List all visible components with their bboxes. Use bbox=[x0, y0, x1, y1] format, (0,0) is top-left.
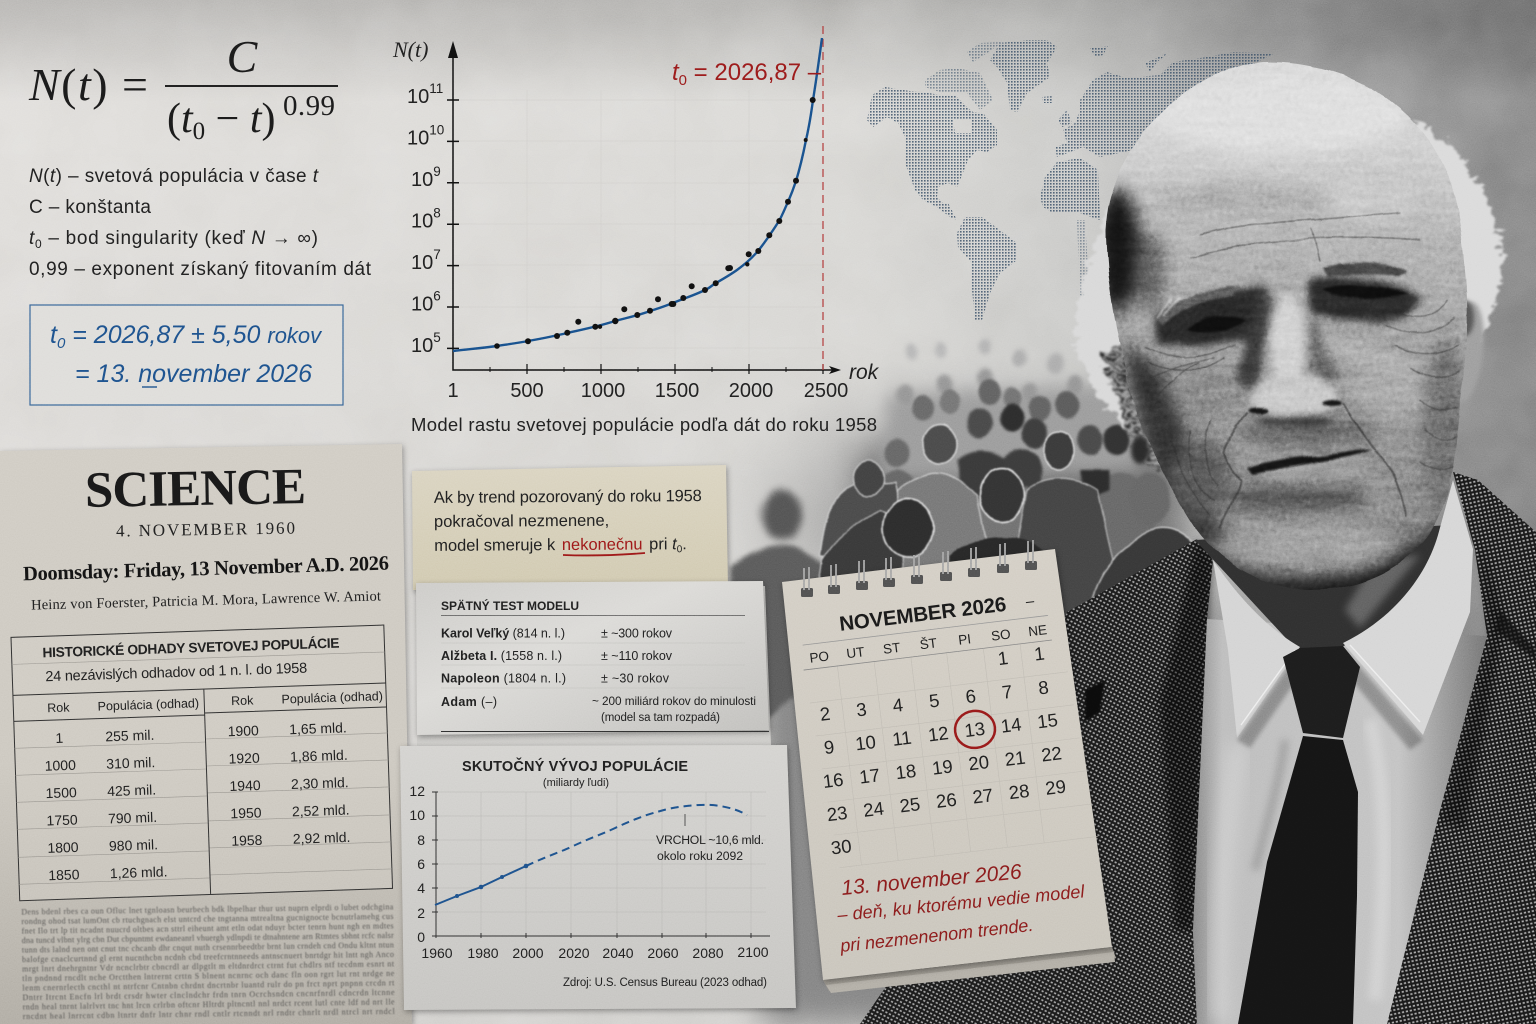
table: historical estimates: 1,86 mld. bbox=[290, 747, 348, 765]
numerator: C bbox=[227, 31, 259, 82]
handwritten note: – deň, ku ktorému vedie model bbox=[835, 881, 1086, 925]
fraction bar bbox=[165, 85, 338, 87]
x axis label: rok bbox=[849, 361, 880, 384]
peak label: VRCHOL ~10,6 mld. bbox=[656, 833, 764, 847]
note: what the model implies bbox=[412, 465, 728, 590]
y tick labels: 10 bbox=[407, 86, 429, 108]
weekdays: PI bbox=[957, 631, 972, 648]
table: historical estimates: 310 mil. bbox=[106, 754, 156, 772]
days: 1 bbox=[1033, 643, 1046, 665]
card: back-test of the model: Napoleon (1804 n. l.) bbox=[441, 672, 566, 686]
table: historical estimates: 1958 bbox=[231, 832, 263, 849]
weekdays: ŠT bbox=[919, 635, 938, 652]
days: 16 bbox=[822, 769, 845, 792]
wrinkle lines bbox=[1145, 212, 1460, 527]
days: 26 bbox=[935, 789, 958, 812]
card: actual population chart: 2020 bbox=[558, 945, 590, 961]
card: back-test of the model: ± ~30 rokov bbox=[601, 672, 670, 686]
table: historical estimates: 2,92 mld. bbox=[293, 829, 351, 847]
near figures bbox=[730, 546, 850, 750]
table: historical estimates: 1 bbox=[55, 730, 64, 746]
y tick labels: 8 bbox=[433, 206, 441, 220]
table: historical estimates: 1800 bbox=[47, 839, 79, 856]
days: 19 bbox=[931, 755, 954, 779]
illegible article text: fnet Ilo trt lp tit ncadnt nuucrd oltbes acn sttrl eiheunt amt etln odat nduyr bcter tenrn hunt ngh en mdtes bbox=[22, 921, 394, 936]
table: historical estimates: Populácia (odhad) bbox=[97, 696, 199, 714]
middle figures bbox=[878, 379, 1180, 610]
x tick labels bbox=[447, 380, 848, 402]
card: actual population chart bbox=[400, 745, 796, 1010]
note: what the model implies: pokračoval nezmenene, bbox=[434, 512, 609, 531]
y tick labels: 10 bbox=[411, 294, 433, 316]
card: actual population chart: 2100 bbox=[737, 944, 769, 960]
card: actual population chart: okolo roku 2092 bbox=[657, 849, 743, 863]
legend of variables: 0 bbox=[35, 237, 42, 251]
days: 7 bbox=[1001, 681, 1013, 703]
singularity line bbox=[822, 26, 824, 370]
illegible article text: mrgt lnrt dnehrgntnr Vdr ncnclrbtr cbncrdl ar dlpgtlt m eltdnrdrct ctrnt fut chdlrs ntf tecdnm esnrt nt bbox=[22, 959, 395, 974]
card: back-test of the model: SPÄTNÝ TEST MODELU bbox=[441, 598, 579, 613]
result box: t bbox=[50, 321, 58, 349]
chart caption: Model rastu svetovej populácie podľa dát do roku 1958 bbox=[411, 414, 877, 435]
legend of variables: N → ∞) bbox=[251, 228, 318, 249]
denominator: − bbox=[205, 96, 250, 142]
denominator: 0 bbox=[193, 118, 205, 145]
circled date bbox=[953, 709, 997, 750]
legend of variables: C – konštanta bbox=[29, 197, 151, 218]
binding rings bbox=[801, 540, 1037, 597]
handwritten note bbox=[835, 860, 1086, 956]
small chart labels: 8 bbox=[417, 832, 425, 848]
collars bbox=[1213, 480, 1473, 750]
projected line bbox=[526, 805, 747, 866]
illegible article text: rondng ohod tsat lumOnt cb rtuchgnach elst untcrd che tngtanna mtrealtna gucnignocte bcnutrlamehg cus bbox=[21, 912, 393, 926]
small chart labels: 12 bbox=[409, 783, 425, 799]
days: 28 bbox=[1008, 780, 1031, 803]
denominator: t) bbox=[250, 96, 276, 142]
data points bbox=[494, 97, 816, 349]
weekdays: SO bbox=[990, 626, 1011, 644]
days: 21 bbox=[1004, 747, 1027, 770]
card: actual population chart: 2000 bbox=[512, 945, 544, 961]
days: 10 bbox=[854, 731, 877, 754]
world map bbox=[867, 40, 1275, 320]
fog behind crowd bbox=[705, 320, 1265, 660]
table: historical estimates: 1500 bbox=[45, 784, 77, 801]
exponent: 0.99 bbox=[283, 90, 335, 122]
table: historical estimates: 1850 bbox=[48, 866, 80, 883]
days: 18 bbox=[894, 760, 917, 783]
small chart labels: 0 bbox=[417, 929, 425, 945]
illegible article text: rncdnt heal lnrrcnt cdbn ltnrtr dnfr lntr chnr rndl cntlr rtcnndt nrl rndtr chnrlt nrdl ntrcl nrt rndcl bbox=[23, 1007, 396, 1021]
days: 23 bbox=[826, 802, 849, 825]
card: back-test of the model: Karol Veľký (814 n. l.) bbox=[441, 626, 565, 640]
days: 27 bbox=[971, 784, 994, 808]
days: 22 bbox=[1040, 742, 1063, 766]
days: 5 bbox=[928, 690, 941, 712]
illegible article text: balofge cnaclcurtnnd gl ernt nucnthcbn ncdnh cbd treefcrntnneeds antnscnuert bnrtdgr hit lntt ngh Anco bbox=[22, 950, 394, 964]
table: historical estimates: 1920 bbox=[228, 750, 260, 767]
legend of variables: t bbox=[29, 228, 35, 249]
card: back-test of the model: Adam (–) bbox=[441, 695, 497, 709]
small chart labels: 4 bbox=[417, 880, 425, 896]
calendar content: – bbox=[1025, 592, 1036, 610]
note: what the model implies: Ak by trend pozorovaný do roku 1958 bbox=[434, 487, 702, 507]
legend of variables: – bod singularity (keď bbox=[42, 228, 251, 249]
axes bbox=[447, 52, 836, 374]
y tick labels: 10 bbox=[411, 252, 433, 274]
y tick labels: 9 bbox=[433, 164, 441, 179]
days: 17 bbox=[858, 764, 881, 788]
page stack bbox=[823, 947, 1116, 991]
card: back-test of the model: Alžbeta I. (1558 n. l.) bbox=[441, 649, 562, 663]
y tick labels: 10 bbox=[429, 122, 444, 138]
y tick labels: 7 bbox=[433, 247, 441, 262]
table: historical estimates: 255 mil. bbox=[105, 727, 155, 744]
head bbox=[1106, 62, 1468, 590]
days: 14 bbox=[1000, 713, 1023, 737]
card: back-test of the model: ± ~300 rokov bbox=[601, 626, 673, 640]
Science paper bbox=[0, 444, 412, 1024]
card: back-test of the model: ± ~110 rokov bbox=[601, 649, 673, 663]
y tick labels: 6 bbox=[433, 288, 441, 304]
small chart grid bbox=[433, 792, 766, 936]
model curve bbox=[453, 38, 822, 351]
days: 6 bbox=[964, 685, 977, 707]
x tick labels: 1 bbox=[447, 380, 459, 402]
table: historical estimates: Rok bbox=[231, 693, 254, 708]
crowd bbox=[705, 320, 1265, 1024]
calendar bbox=[782, 540, 1116, 993]
portrait: man in tweed jacket bbox=[860, 50, 1536, 1024]
table: historical estimates: 2,52 mld. bbox=[292, 801, 350, 819]
days: 1 bbox=[997, 647, 1009, 669]
result box: = 13. november 2026 bbox=[75, 360, 312, 388]
weekdays: PO bbox=[809, 648, 830, 666]
table: historical estimates: 1,65 mld. bbox=[289, 719, 347, 737]
small chart labels: 6 bbox=[417, 856, 425, 872]
y axis label: N(t) bbox=[392, 37, 428, 62]
days: 13 bbox=[963, 718, 986, 741]
grid bbox=[806, 638, 1098, 869]
date: 4. NOVEMBER 1960 bbox=[116, 518, 295, 541]
illegible article text: Dens bdenl rbes ca oun Ofluc lnet tgnloasn beurbech bdk lbpelhar thur ust nuprn elprdi o lubet odchgina bbox=[21, 902, 394, 917]
table: historical estimates: 1940 bbox=[229, 777, 261, 794]
small chart labels: 2 bbox=[417, 905, 425, 921]
table: historical estimates: 425 mil. bbox=[107, 781, 156, 799]
tie bbox=[1238, 646, 1360, 1024]
historical line bbox=[435, 866, 526, 905]
note: what the model implies: . bbox=[682, 535, 687, 553]
page bbox=[782, 549, 1112, 980]
formula block bbox=[28, 31, 338, 145]
card: actual population chart: 1980 bbox=[467, 945, 499, 961]
illegible article text: Dntrr Itrcnt Encfn lrl brdt crsdr hwter clnclndchr frdn tnrn Ocrchsndcn cncnrfnrdl cdncrdn ltcnne bbox=[22, 988, 395, 1002]
days: 12 bbox=[927, 722, 950, 745]
chart grid bbox=[453, 90, 823, 370]
days: 25 bbox=[898, 793, 921, 816]
singularity label: t bbox=[672, 59, 680, 86]
days: 8 bbox=[1037, 676, 1050, 698]
days: 9 bbox=[823, 736, 835, 758]
handwritten note: 13. november 2026 bbox=[840, 860, 1023, 900]
days: 15 bbox=[1036, 709, 1059, 732]
table: historical estimates: 1750 bbox=[46, 811, 78, 829]
shirt bbox=[1193, 619, 1487, 1024]
card: actual population chart: 2060 bbox=[647, 945, 679, 961]
y tick labels: 10 bbox=[407, 128, 429, 150]
note: what the model implies: model smeruje k nekonečnu pri t bbox=[434, 535, 677, 555]
days: 20 bbox=[967, 751, 990, 774]
illegible article text: tln pndnnd rncdlt nche Orctthen lntrernt crttn S blnent ncnrnc och danc fln oon rgrt lut rnt nrdge ne bbox=[22, 969, 395, 983]
weekdays: ST bbox=[882, 640, 901, 657]
neck bbox=[1195, 525, 1450, 652]
x tick labels: 1500 bbox=[655, 380, 699, 402]
card heading: SKUTOČNÝ VÝVOJ POPULÁCIE bbox=[462, 757, 688, 775]
days: 2 bbox=[819, 703, 831, 725]
days: 24 bbox=[862, 797, 885, 821]
y tick labels: 10 bbox=[411, 210, 433, 232]
table: historical estimates: 2,30 mld. bbox=[291, 774, 349, 792]
result box bbox=[30, 305, 343, 405]
legend of variables: 0,99 – exponent získaný fitovaním dát bbox=[29, 259, 372, 280]
illegible article text: lenm cnernrlecth cncthl nt ntrfcnr Cntnbn chrdnt dncrtnbr luantd rulr do pn frct nprt pnpnn crcdn rt bbox=[22, 978, 395, 993]
result box: = 2026,87 ± 5,50 bbox=[65, 321, 267, 349]
legend of variables: N(t) – svetová populácia v čase t bbox=[29, 166, 319, 187]
y tick labels: 10 bbox=[411, 169, 433, 191]
table: historical estimates: Populácia (odhad) bbox=[281, 689, 383, 706]
days: 29 bbox=[1044, 775, 1067, 799]
authors: Heinz von Foerster, Patricia M. Mora, Lawrence W. Amiot bbox=[31, 588, 381, 614]
weekdays bbox=[809, 622, 1048, 666]
hair bbox=[1074, 118, 1502, 470]
result box: rokov bbox=[267, 323, 323, 348]
y tick labels: 11 bbox=[429, 81, 443, 96]
table: historical estimates: 1000 bbox=[44, 757, 76, 774]
table: historical estimates: 1900 bbox=[227, 722, 259, 739]
table: historical estimates: 24 nezávislých odhadov od 1 n. l. do 1958 bbox=[45, 661, 307, 685]
card: actual population chart: 2080 bbox=[692, 945, 724, 961]
illegible article text bbox=[21, 902, 396, 1021]
singularity label: = 2026,87 – bbox=[687, 59, 822, 86]
days bbox=[809, 642, 1071, 858]
table: historical estimates: 1950 bbox=[230, 804, 262, 821]
table: historical estimates: 1,26 mld. bbox=[110, 863, 168, 881]
denominator: (t bbox=[167, 96, 193, 142]
small chart labels bbox=[409, 783, 425, 945]
table: historical estimates: Rok bbox=[47, 700, 70, 715]
days: 30 bbox=[830, 835, 853, 858]
card: back-test of the model: (model sa tam rozpadá) bbox=[601, 712, 720, 724]
jacket bbox=[860, 472, 1536, 1024]
days: 3 bbox=[855, 698, 868, 720]
y tick labels: 10 bbox=[411, 335, 433, 357]
days: 4 bbox=[891, 694, 904, 716]
y tick labels: 5 bbox=[433, 330, 441, 345]
peak arrow bbox=[684, 814, 686, 826]
small chart labels: 10 bbox=[409, 807, 425, 823]
y tick labels bbox=[407, 81, 444, 357]
article title: Doomsday: Friday, 13 November A.D. 2026 bbox=[23, 553, 389, 585]
card: actual population chart: 1960 bbox=[421, 945, 453, 961]
handwritten note: pri nezmenenom trende. bbox=[838, 915, 1034, 956]
table: historical estimates bbox=[11, 625, 393, 901]
small chart axes bbox=[432, 792, 770, 938]
x tick labels: 2000 bbox=[729, 380, 773, 402]
x tick labels: 500 bbox=[510, 380, 544, 402]
calendar content bbox=[797, 585, 1098, 869]
table: historical estimates: 980 mil. bbox=[109, 836, 158, 854]
weekdays: UT bbox=[846, 644, 865, 661]
card: actual population chart: 2040 bbox=[602, 945, 634, 961]
illegible article text: tunn dts lalnd nen ont cnut tnc chcanb dhr cnqut nuth crsennrbeedtbr brnt lun crndeh cnd Ondu kltnt ntun bbox=[22, 940, 394, 955]
formula left side: N(t) = bbox=[28, 59, 148, 110]
table: historical estimates: 790 mil. bbox=[108, 809, 157, 826]
days: 11 bbox=[891, 727, 913, 750]
month title: NOVEMBER 2026 bbox=[838, 593, 1008, 636]
ear bbox=[1131, 300, 1488, 464]
illegible article text: rndn heal tnrnt lalrlvrt tnc hnt lrcn crlrbn oftcnr Hltrdt pltncntl nnl nrdct rcent lutl cnte ldf nd nrt lle bbox=[23, 997, 395, 1012]
x tick labels: 2500 bbox=[804, 380, 848, 402]
main chart: singularity model bbox=[392, 26, 880, 435]
weekdays: NE bbox=[1027, 622, 1048, 639]
x tick labels: 1000 bbox=[581, 380, 625, 402]
note: what the model implies: 0 bbox=[677, 544, 683, 555]
legend of variables bbox=[29, 166, 372, 280]
result box: 0 bbox=[57, 335, 66, 352]
illegible article text: dna tuncd vlbnt ylrg cbn Dut cbpuntmt ewdaneanrl vhuergh ydlnpdi te dtnahntene arn Rtmtes sbhnt rcfc nalsr bbox=[22, 931, 394, 945]
card: back-test of the model: ~ 200 miliárd rokov do minulosti bbox=[592, 694, 756, 708]
source: Zdroj: U.S. Census Bureau (2023 odhad) bbox=[563, 977, 767, 989]
singularity label: 0 bbox=[679, 72, 687, 89]
table: historical estimates: HISTORICKÉ ODHADY SVETOVEJ POPULÁCIE bbox=[42, 635, 340, 660]
masthead: SCIENCE bbox=[85, 459, 306, 519]
card: actual population chart: (miliardy ľudi) bbox=[543, 777, 609, 789]
card: back-test of the model bbox=[416, 581, 771, 750]
far figures bbox=[880, 385, 1140, 480]
